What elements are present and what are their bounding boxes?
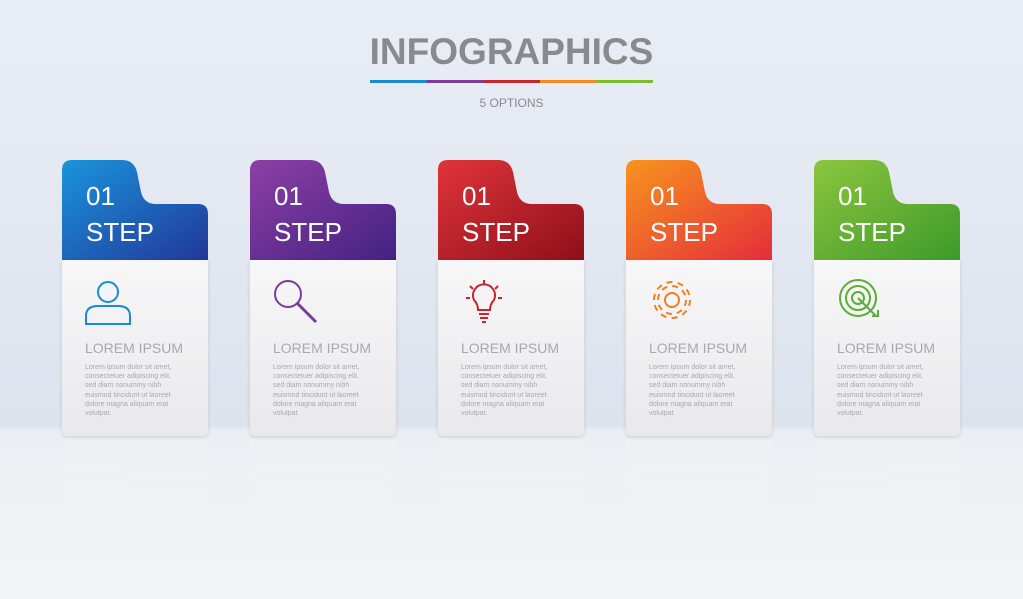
icon: target: [839, 279, 879, 317]
card 1: volutpat.: [85, 410, 111, 417]
card 4: 01: [650, 181, 679, 211]
icon: bulb: [466, 280, 502, 323]
card 4: euismod tincidunt ut laoreet: [649, 392, 735, 399]
card 2: euismod tincidunt ut laoreet: [273, 392, 359, 399]
card 2: LOREM IPSUM: [273, 340, 371, 356]
icon: gear: [653, 281, 691, 319]
card 3: Lorem ipsum dolor sit amet,: [461, 364, 547, 371]
card 3: 01: [462, 181, 491, 211]
card 1: LOREM IPSUM: [85, 340, 183, 356]
card 1: Lorem ipsum dolor sit amet,: [85, 364, 171, 371]
card 4: consectetuer adipiscing elit,: [649, 373, 735, 380]
color underline: [370, 80, 653, 83]
card 3: dolore magna aliquam erat: [461, 401, 544, 408]
card 2: Lorem ipsum dolor sit amet,: [273, 364, 359, 371]
card 4: sed diam nonummy nibh: [649, 382, 725, 389]
card 1: [61, 160, 209, 438]
card 2: volutpat.: [273, 410, 299, 417]
card 3: LOREM IPSUM: [461, 340, 559, 356]
card 5: Lorem ipsum dolor sit amet,: [837, 364, 923, 371]
card 3: euismod tincidunt ut laoreet: [461, 392, 547, 399]
title: INFOGRAPHICS: [370, 31, 653, 72]
card 1: consectetuer adipiscing elit,: [85, 373, 171, 380]
card 3: [437, 160, 585, 438]
card 2: consectetuer adipiscing elit,: [273, 373, 359, 380]
card 1: STEP: [86, 217, 154, 247]
card 5: euismod tincidunt ut laoreet: [837, 392, 923, 399]
card 3: STEP: [462, 217, 530, 247]
card 1: dolore magna aliquam erat: [85, 401, 168, 408]
subtitle: 5 OPTIONS: [479, 96, 544, 110]
card 4: Lorem ipsum dolor sit amet,: [649, 364, 735, 371]
card 4: dolore magna aliquam erat: [649, 401, 732, 408]
card 5: 01: [838, 181, 867, 211]
card 5: [813, 160, 961, 438]
card 5: STEP: [838, 217, 906, 247]
card 5: dolore magna aliquam erat: [837, 401, 920, 408]
card 5: volutpat.: [837, 410, 863, 417]
icon: magnifier: [274, 280, 317, 323]
card 3: sed diam nonummy nibh: [461, 382, 537, 389]
card 1: 01: [86, 181, 115, 211]
card 2: dolore magna aliquam erat: [273, 401, 356, 408]
card 4: STEP: [650, 217, 718, 247]
card 2: 01: [274, 181, 303, 211]
card 1: euismod tincidunt ut laoreet: [85, 392, 171, 399]
card 4: [625, 160, 773, 438]
card 4: volutpat.: [649, 410, 675, 417]
card 2: STEP: [274, 217, 342, 247]
icon: person: [85, 281, 131, 325]
card 4: LOREM IPSUM: [649, 340, 747, 356]
card 5: sed diam nonummy nibh: [837, 382, 913, 389]
card 1: sed diam nonummy nibh: [85, 382, 161, 389]
card 2: sed diam nonummy nibh: [273, 382, 349, 389]
reflections: [0, 438, 1023, 568]
card 3: volutpat.: [461, 410, 487, 417]
card 5: consectetuer adipiscing elit,: [837, 373, 923, 380]
card 2: [249, 160, 397, 438]
card 3: consectetuer adipiscing elit,: [461, 373, 547, 380]
card 5: LOREM IPSUM: [837, 340, 935, 356]
